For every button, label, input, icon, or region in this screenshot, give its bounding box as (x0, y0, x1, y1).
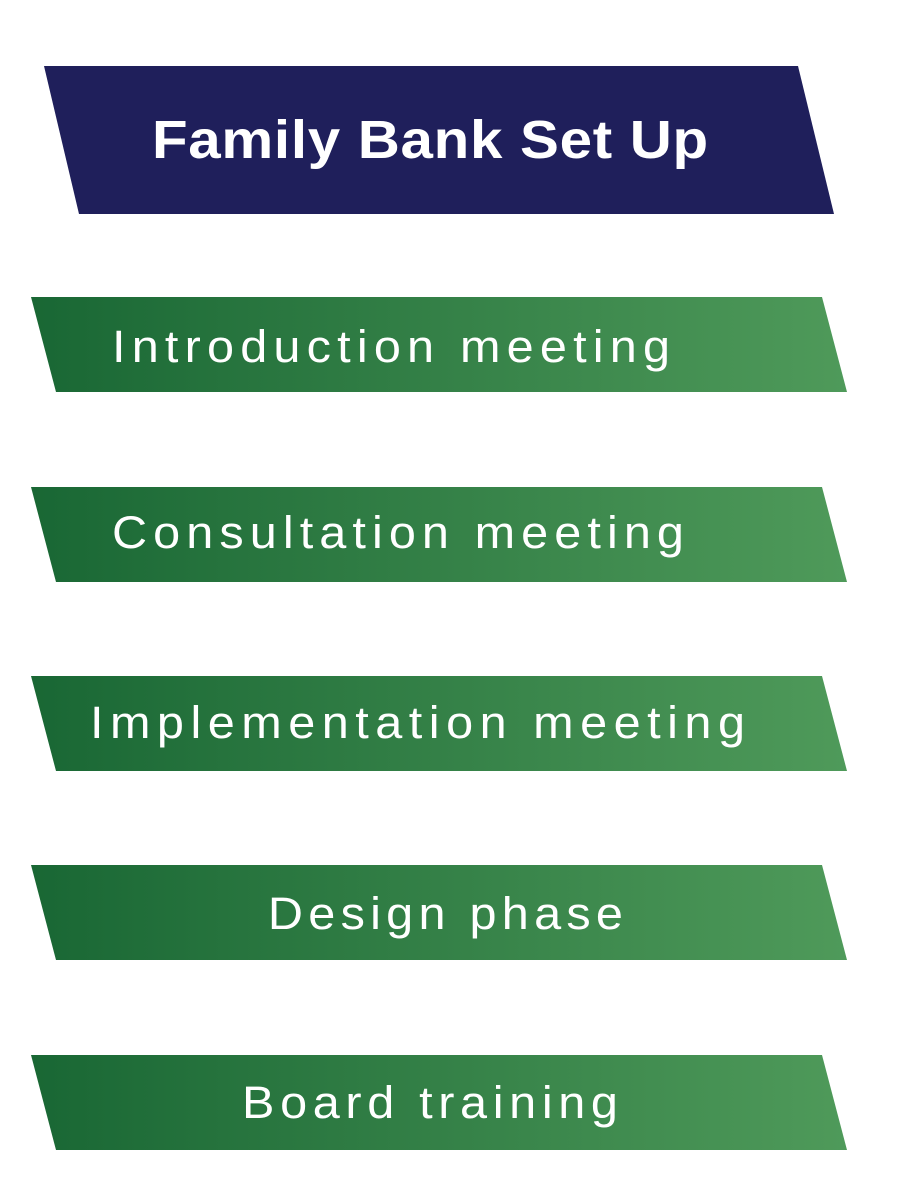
step 2: consultation meeting (31, 487, 847, 582)
step 1: introduction meeting (31, 297, 847, 392)
title banner: Family Bank Set Up (152, 109, 708, 170)
step 3: implementation meeting: Implementation meeting (90, 698, 745, 748)
step 3: implementation meeting (31, 676, 847, 771)
step 2: consultation meeting: Consultation meeting (112, 508, 684, 558)
step 5: board training: Board training (242, 1078, 618, 1128)
step 4: design phase (31, 865, 847, 960)
step 5: board training (31, 1055, 847, 1150)
step 4: design phase: Design phase (268, 889, 623, 939)
title banner (44, 66, 834, 214)
step 1: introduction meeting: Introduction meeting (112, 322, 670, 372)
